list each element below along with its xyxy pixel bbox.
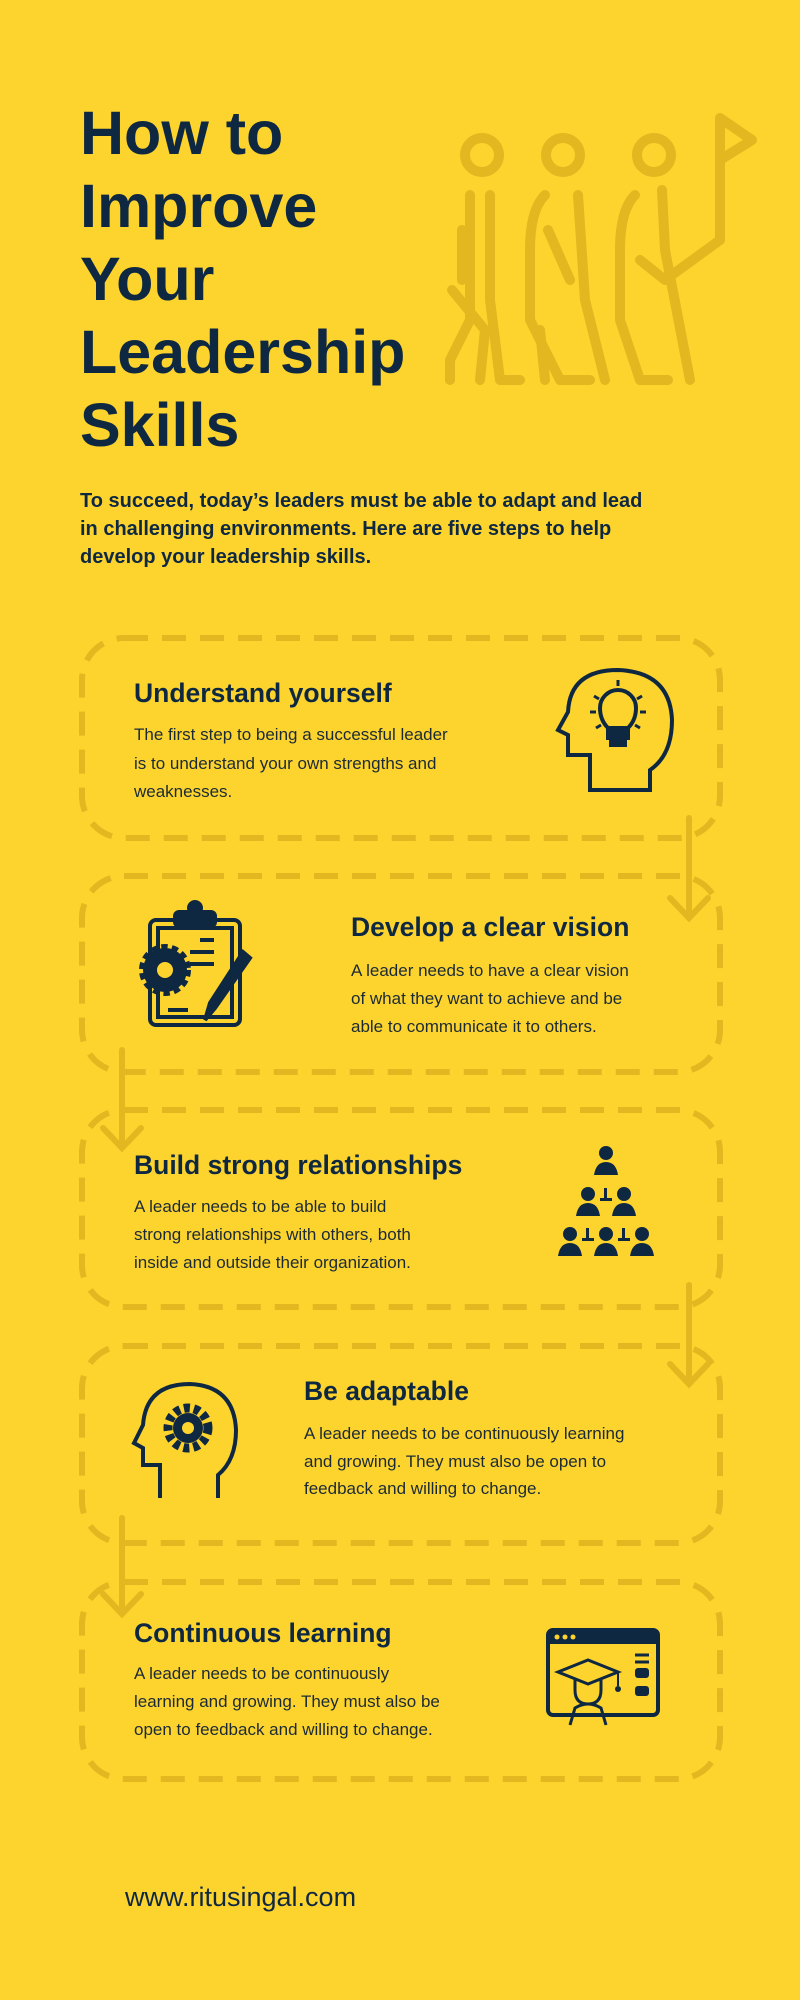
icon: head with lightbulb <box>558 670 672 790</box>
title: Improve <box>80 172 317 240</box>
title: Your <box>80 245 214 313</box>
panel: develop a clear vision: Develop a clear vision <box>351 912 629 942</box>
panel: understand yourself: weaknesses. <box>133 782 232 801</box>
icon: online graduate browser <box>548 1630 658 1725</box>
panel: be adaptable: and growing. They must also be open to <box>304 1452 606 1471</box>
intro text: in challenging environments. Here are five steps to help <box>80 518 611 540</box>
icon: three walking figures with flag <box>450 118 752 380</box>
title <box>80 99 405 459</box>
panel: continuous learning: Continuous learning <box>134 1618 392 1648</box>
icon: clipboard with gear and pencil <box>143 902 250 1025</box>
panel: build strong relationships: inside and outside their organization. <box>134 1253 411 1272</box>
panel: be adaptable: feedback and willing to change. <box>304 1479 541 1498</box>
title: Skills <box>80 391 239 459</box>
intro text: develop your leadership skills. <box>80 546 371 568</box>
panel: understand yourself: The first step to being a successful leader <box>134 725 448 744</box>
panel: build strong relationships: strong relationships with others, both <box>134 1225 411 1244</box>
panel: be adaptable: Be adaptable <box>304 1376 469 1406</box>
panel: develop a clear vision: of what they want to achieve and be <box>351 989 622 1008</box>
panel: continuous learning <box>82 1582 720 1779</box>
intro text <box>80 490 642 568</box>
panel: build strong relationships: Build strong relationships <box>134 1150 462 1180</box>
panel: be adaptable: A leader needs to be continuously learning <box>304 1424 624 1443</box>
panel: continuous learning: A leader needs to be continuously <box>134 1664 390 1683</box>
panel: be adaptable <box>82 1346 720 1543</box>
title: How to <box>80 99 283 167</box>
footer url: www.ritusingal.com <box>124 1882 356 1912</box>
arrows between cards <box>103 818 708 1614</box>
panel: continuous learning: open to feedback and willing to change. <box>134 1720 433 1739</box>
title: Leadership <box>80 318 405 386</box>
panel: understand yourself: is to understand your own strengths and <box>134 754 436 773</box>
icon: head with gear <box>134 1384 236 1498</box>
panel: build strong relationships <box>82 1110 720 1307</box>
panel: develop a clear vision <box>82 876 720 1072</box>
intro text: To succeed, today’s leaders must be able to adapt and lead <box>80 490 642 512</box>
panel: understand yourself: Understand yourself <box>134 678 392 708</box>
panel: develop a clear vision: A leader needs to have a clear vision <box>351 961 629 980</box>
panel: continuous learning: learning and growing. They must also be <box>134 1692 440 1711</box>
icon: people pyramid <box>558 1146 654 1256</box>
panel: understand yourself <box>82 638 720 838</box>
panel: develop a clear vision: able to communicate it to others. <box>351 1017 597 1036</box>
panel: build strong relationships: A leader needs to be able to build <box>134 1197 386 1216</box>
